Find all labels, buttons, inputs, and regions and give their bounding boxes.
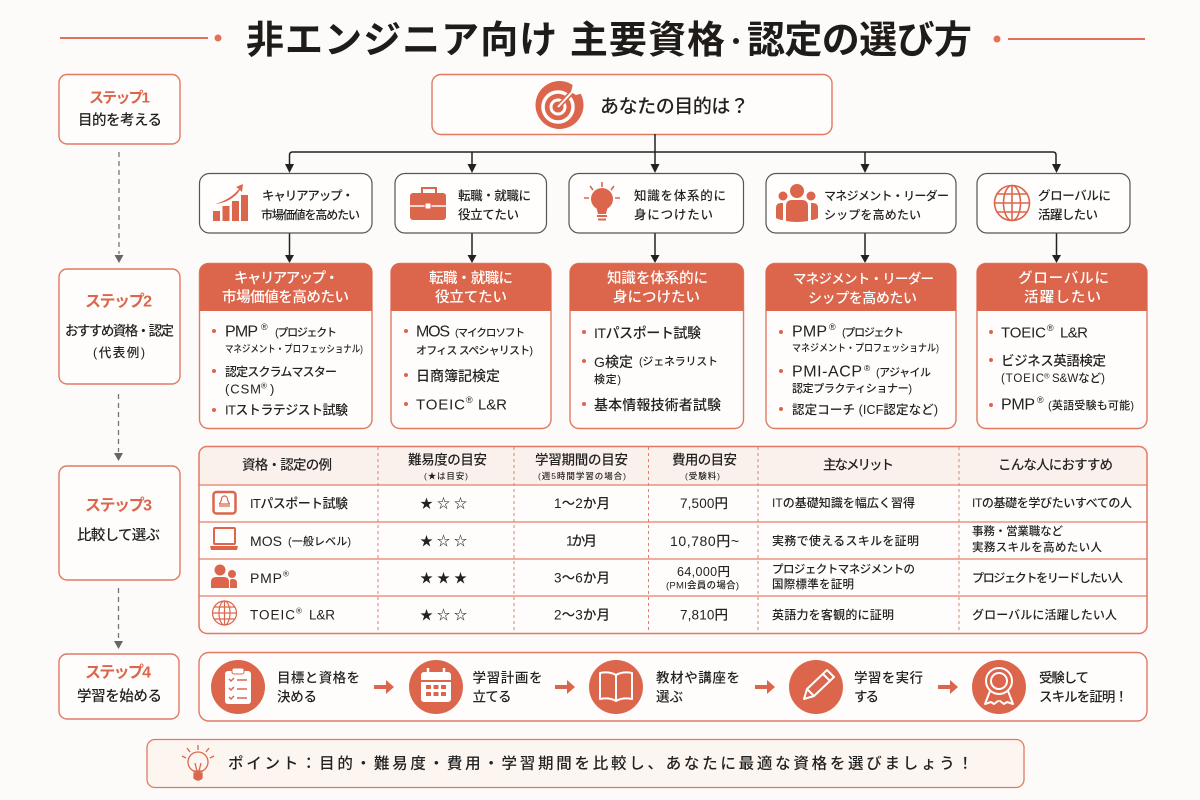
- step 2 label: おすすめ資格・認定: [65, 324, 174, 338]
- card list: ®: [261, 382, 267, 390]
- row: IT passport: ITパスポート試験: [250, 496, 348, 511]
- card list: S&Wなど): [1052, 372, 1105, 385]
- flow connectors: [285, 134, 1061, 263]
- card list: オフィス スペシャリスト): [416, 344, 533, 357]
- icon: outline bulb: [182, 745, 214, 780]
- card list: ®: [1044, 372, 1050, 380]
- card: job change certifications: [391, 264, 551, 428]
- card list: 基本情報技術者試験: [594, 397, 721, 413]
- step 2 label: [59, 269, 180, 384]
- process step: choose materials: 教材や講座を: [656, 670, 740, 686]
- card list: (マイクロソフト: [455, 327, 525, 339]
- table header row: 難易度の目安: [408, 452, 487, 468]
- option: systematic knowledge: [569, 174, 744, 233]
- icon: light bulb: [584, 182, 620, 220]
- row: MOS: [210, 524, 1102, 554]
- card: management certifications: [766, 264, 956, 428]
- step 1 label: [59, 74, 180, 144]
- table header row: (受験料): [685, 471, 720, 481]
- row: TOEIC: TOEIC: [250, 608, 295, 622]
- process step: study: 学習を実行: [854, 670, 923, 686]
- row: TOEIC: 英語力を客観的に証明: [772, 607, 894, 622]
- step 4 label: ステップ4: [85, 664, 151, 682]
- option: management: シップを高めたい: [824, 207, 921, 222]
- process step: take exam: 受験して: [1039, 670, 1089, 686]
- comparison table: [199, 446, 1147, 634]
- row: TOEIC: [212, 601, 1117, 625]
- card list: ®: [829, 322, 836, 332]
- process step: decide goal: 目標と資格を: [277, 670, 360, 686]
- row: PMP: 国際標準を証明: [772, 577, 854, 591]
- row: MOS: 10,780円~: [670, 533, 739, 549]
- title: [60, 20, 1145, 62]
- card list: ビジネス英語検定: [1001, 352, 1106, 368]
- row: TOEIC: L&R: [309, 608, 335, 622]
- row: PMP: (PMI会員の場合): [666, 580, 739, 592]
- option: job change: 転職・就職に: [458, 188, 531, 203]
- card header: キャリアアップ・: [234, 270, 339, 287]
- process step: take exam: [972, 660, 1128, 714]
- card list: マネジメント・プロフェッショナル): [792, 342, 939, 354]
- option: systematic knowledge: 身につけたい: [634, 207, 713, 222]
- card list: (プロジェクト: [842, 326, 904, 339]
- card header: 市場価値を高めたい: [222, 288, 349, 306]
- option: global: グローバルに: [1038, 188, 1111, 203]
- title: 認定の選び方: [747, 20, 972, 62]
- card: knowledge certifications: [570, 264, 744, 428]
- card list: [989, 323, 1134, 414]
- row: TOEIC: ®: [296, 606, 302, 616]
- card list: TOEIC: [416, 396, 465, 414]
- card list: L&R: [1060, 324, 1088, 342]
- icon: business people: [211, 564, 237, 588]
- row: TOEIC: ★ ☆ ☆: [420, 608, 467, 622]
- option: global: 活躍したい: [1038, 208, 1098, 222]
- card list: 日商簿記検定: [416, 368, 500, 384]
- card list: (CSM: [225, 382, 261, 396]
- arrow: [555, 680, 575, 694]
- card header: 役立てたい: [435, 289, 507, 306]
- card header: [200, 264, 372, 311]
- row: MOS: MOS: [250, 533, 282, 549]
- row: IT passport: ★ ☆ ☆: [420, 496, 467, 511]
- option: career up: 市場価値を高めたい: [261, 207, 360, 222]
- card header: [977, 264, 1147, 311]
- row: TOEIC: 7,810円: [680, 608, 728, 622]
- card list: [404, 324, 533, 414]
- arrow: [755, 680, 775, 694]
- card header: [391, 264, 551, 311]
- card list: (アジャイル: [876, 366, 931, 379]
- row: PMP: 64,000円: [677, 565, 730, 579]
- card list: ITパスポート試験: [594, 325, 701, 341]
- step 3 label: 比較して選ぶ: [77, 527, 160, 544]
- card list: [582, 325, 721, 413]
- card list: 認定スクラムマスター: [225, 365, 337, 379]
- table header row: 資格・認定の例: [242, 458, 332, 472]
- table header row: こんな人におすすめ: [998, 458, 1113, 472]
- card list: ): [270, 382, 274, 396]
- row: PMP: ★ ★ ★: [420, 570, 467, 586]
- card list: G検定: [594, 354, 633, 370]
- row: IT passport: ITの基礎を学びたいすべての人: [972, 495, 1132, 510]
- option: job change: 役立てたい: [458, 207, 519, 222]
- card: career up certifications: [200, 264, 372, 428]
- table header row: (★は目安): [424, 471, 468, 481]
- row: MOS: 事務・営業職など: [972, 524, 1064, 538]
- step 1 label: 目的を考える: [78, 112, 162, 129]
- icon: calendar: [421, 668, 451, 702]
- step 1 label: ステップ1: [89, 90, 150, 106]
- row: PMP: PMP: [250, 570, 282, 586]
- card list: 認定プラクティショナー): [792, 382, 912, 395]
- step 2 label: ステップ2: [85, 292, 152, 310]
- process step: choose materials: [589, 660, 740, 714]
- card list: PMP: [225, 324, 258, 340]
- icon: target: [536, 81, 584, 129]
- icon: clipboard: [225, 668, 251, 704]
- arrow: [374, 680, 394, 694]
- table header row: [242, 452, 1113, 481]
- point callout: ポイント：目的・難易度・費用・学習期間を比較し、あなたに最適な資格を選びましょう！: [228, 754, 973, 772]
- arrow: [938, 680, 958, 694]
- dashed arrow: step 3 to 4: [114, 588, 123, 649]
- row: IT passport: 7,500円: [680, 496, 728, 511]
- icon: laptop: [210, 528, 238, 550]
- step 3 label: [59, 466, 180, 580]
- row: IT passport: 1〜2か月: [554, 496, 610, 511]
- icon: award rosette: [985, 668, 1013, 704]
- step 2 label: (代表例): [93, 345, 145, 360]
- card list: ®: [466, 395, 473, 405]
- row: PMP: プロジェクトマネジメントの: [772, 563, 915, 576]
- row: IT passport: ITの基礎知識を幅広く習得: [772, 495, 915, 510]
- step 4 label: 学習を始める: [77, 688, 162, 705]
- icon: pencil: [804, 670, 834, 699]
- dashed arrow: step 2 to 3: [114, 394, 123, 461]
- card list: (英語受験も可能): [1048, 398, 1134, 412]
- card header: [570, 264, 744, 311]
- card list: (ジェネラリスト: [639, 355, 718, 368]
- process step: decide goal: [211, 660, 360, 714]
- process step: study: [789, 660, 923, 714]
- option: systematic knowledge: 知識を体系的に: [634, 188, 726, 203]
- icon: open book: [600, 672, 632, 701]
- card header: グローバルに: [1018, 270, 1109, 287]
- row: PMP: [211, 563, 1123, 592]
- card list: L&R: [478, 396, 507, 414]
- row: MOS: (一般レベル): [288, 535, 351, 548]
- card list: MOS: [416, 324, 450, 340]
- row: PMP: ®: [283, 570, 289, 578]
- point callout: [147, 740, 1024, 788]
- card: global certifications: [977, 264, 1147, 428]
- card list: ITストラテジスト試験: [225, 402, 348, 418]
- card list: 検定): [594, 372, 621, 386]
- process step: choose materials: 選ぶ: [656, 690, 684, 704]
- row: PMP: 3〜6か月: [554, 570, 610, 586]
- card header: シップを高めたい: [808, 290, 917, 306]
- card list: PMP: [792, 324, 827, 340]
- card list: (プロジェクト: [275, 326, 337, 339]
- row: MOS: 1か月: [566, 534, 597, 548]
- card header: 活躍したい: [1024, 289, 1101, 306]
- process step: decide goal: 決める: [277, 690, 317, 704]
- icon: globe small: [212, 601, 236, 625]
- card list: 認定コーチ (ICF認定など): [792, 403, 938, 417]
- icon: rising bar chart: [213, 184, 248, 221]
- process step: study plan: 学習計画を: [472, 670, 542, 686]
- option: career up: [200, 174, 372, 233]
- card header: 転職・就職に: [429, 270, 513, 287]
- row: MOS: 実務スキルを高めたい人: [972, 540, 1102, 554]
- row: IT passport: [214, 492, 1132, 514]
- option: management: [766, 174, 956, 233]
- card list: ®: [1047, 323, 1054, 333]
- option: career up: キャリアアップ・: [262, 189, 354, 203]
- process step: study: する: [854, 690, 879, 704]
- option: management: マネジメント・リーダー: [824, 188, 949, 203]
- row: MOS: ★ ☆ ☆: [420, 534, 467, 548]
- row: TOEIC: 2〜3か月: [554, 608, 610, 622]
- title: 非エンジニア向け 主要資格: [246, 20, 725, 62]
- row: PMP: プロジェクトをリードしたい人: [972, 571, 1123, 585]
- icon: globe: [994, 186, 1030, 220]
- card list: ®: [1037, 395, 1044, 405]
- card list: ®: [261, 322, 268, 332]
- step 3 label: ステップ3: [85, 496, 152, 514]
- table header row: 学習期間の目安: [535, 452, 628, 468]
- table header row: 費用の目安: [672, 452, 737, 468]
- process step: study plan: 立てる: [472, 690, 512, 704]
- card header: [766, 264, 956, 311]
- table header row: (週5時間学習の場合): [538, 471, 626, 481]
- row: MOS: 実務で使えるスキルを証明: [772, 533, 919, 548]
- card list: TOEIC: [1001, 324, 1046, 342]
- option: job change: [395, 174, 546, 233]
- row: TOEIC: グローバルに活躍したい人: [972, 607, 1117, 622]
- step 4 label: [59, 654, 179, 719]
- card list: マネジメント・プロフェッショナル): [225, 344, 363, 356]
- card list: PMP: [1001, 396, 1035, 414]
- learning process panel: [199, 652, 1147, 721]
- icon: briefcase: [410, 188, 446, 220]
- card list: [212, 322, 363, 418]
- card header: 知識を体系的に: [607, 270, 708, 287]
- icon: id card: [214, 492, 236, 514]
- icon: people: [776, 184, 818, 222]
- card header: マネジメント・リーダー: [793, 270, 934, 286]
- card list: (TOEIC: [1001, 373, 1044, 385]
- card list: PMI-ACP: [792, 364, 862, 380]
- process step: study plan: [409, 660, 542, 714]
- option: global: [977, 174, 1130, 233]
- goal question box: あなたの目的は？: [600, 96, 749, 118]
- card list: ®: [864, 363, 871, 373]
- table header row: 主なメリット: [823, 458, 894, 472]
- goal question box: [432, 74, 832, 134]
- card header: 身につけたい: [613, 289, 700, 306]
- process step: take exam: スキルを証明！: [1039, 690, 1128, 704]
- dashed arrow: step 1 to 2: [114, 152, 124, 263]
- card list: [779, 322, 939, 417]
